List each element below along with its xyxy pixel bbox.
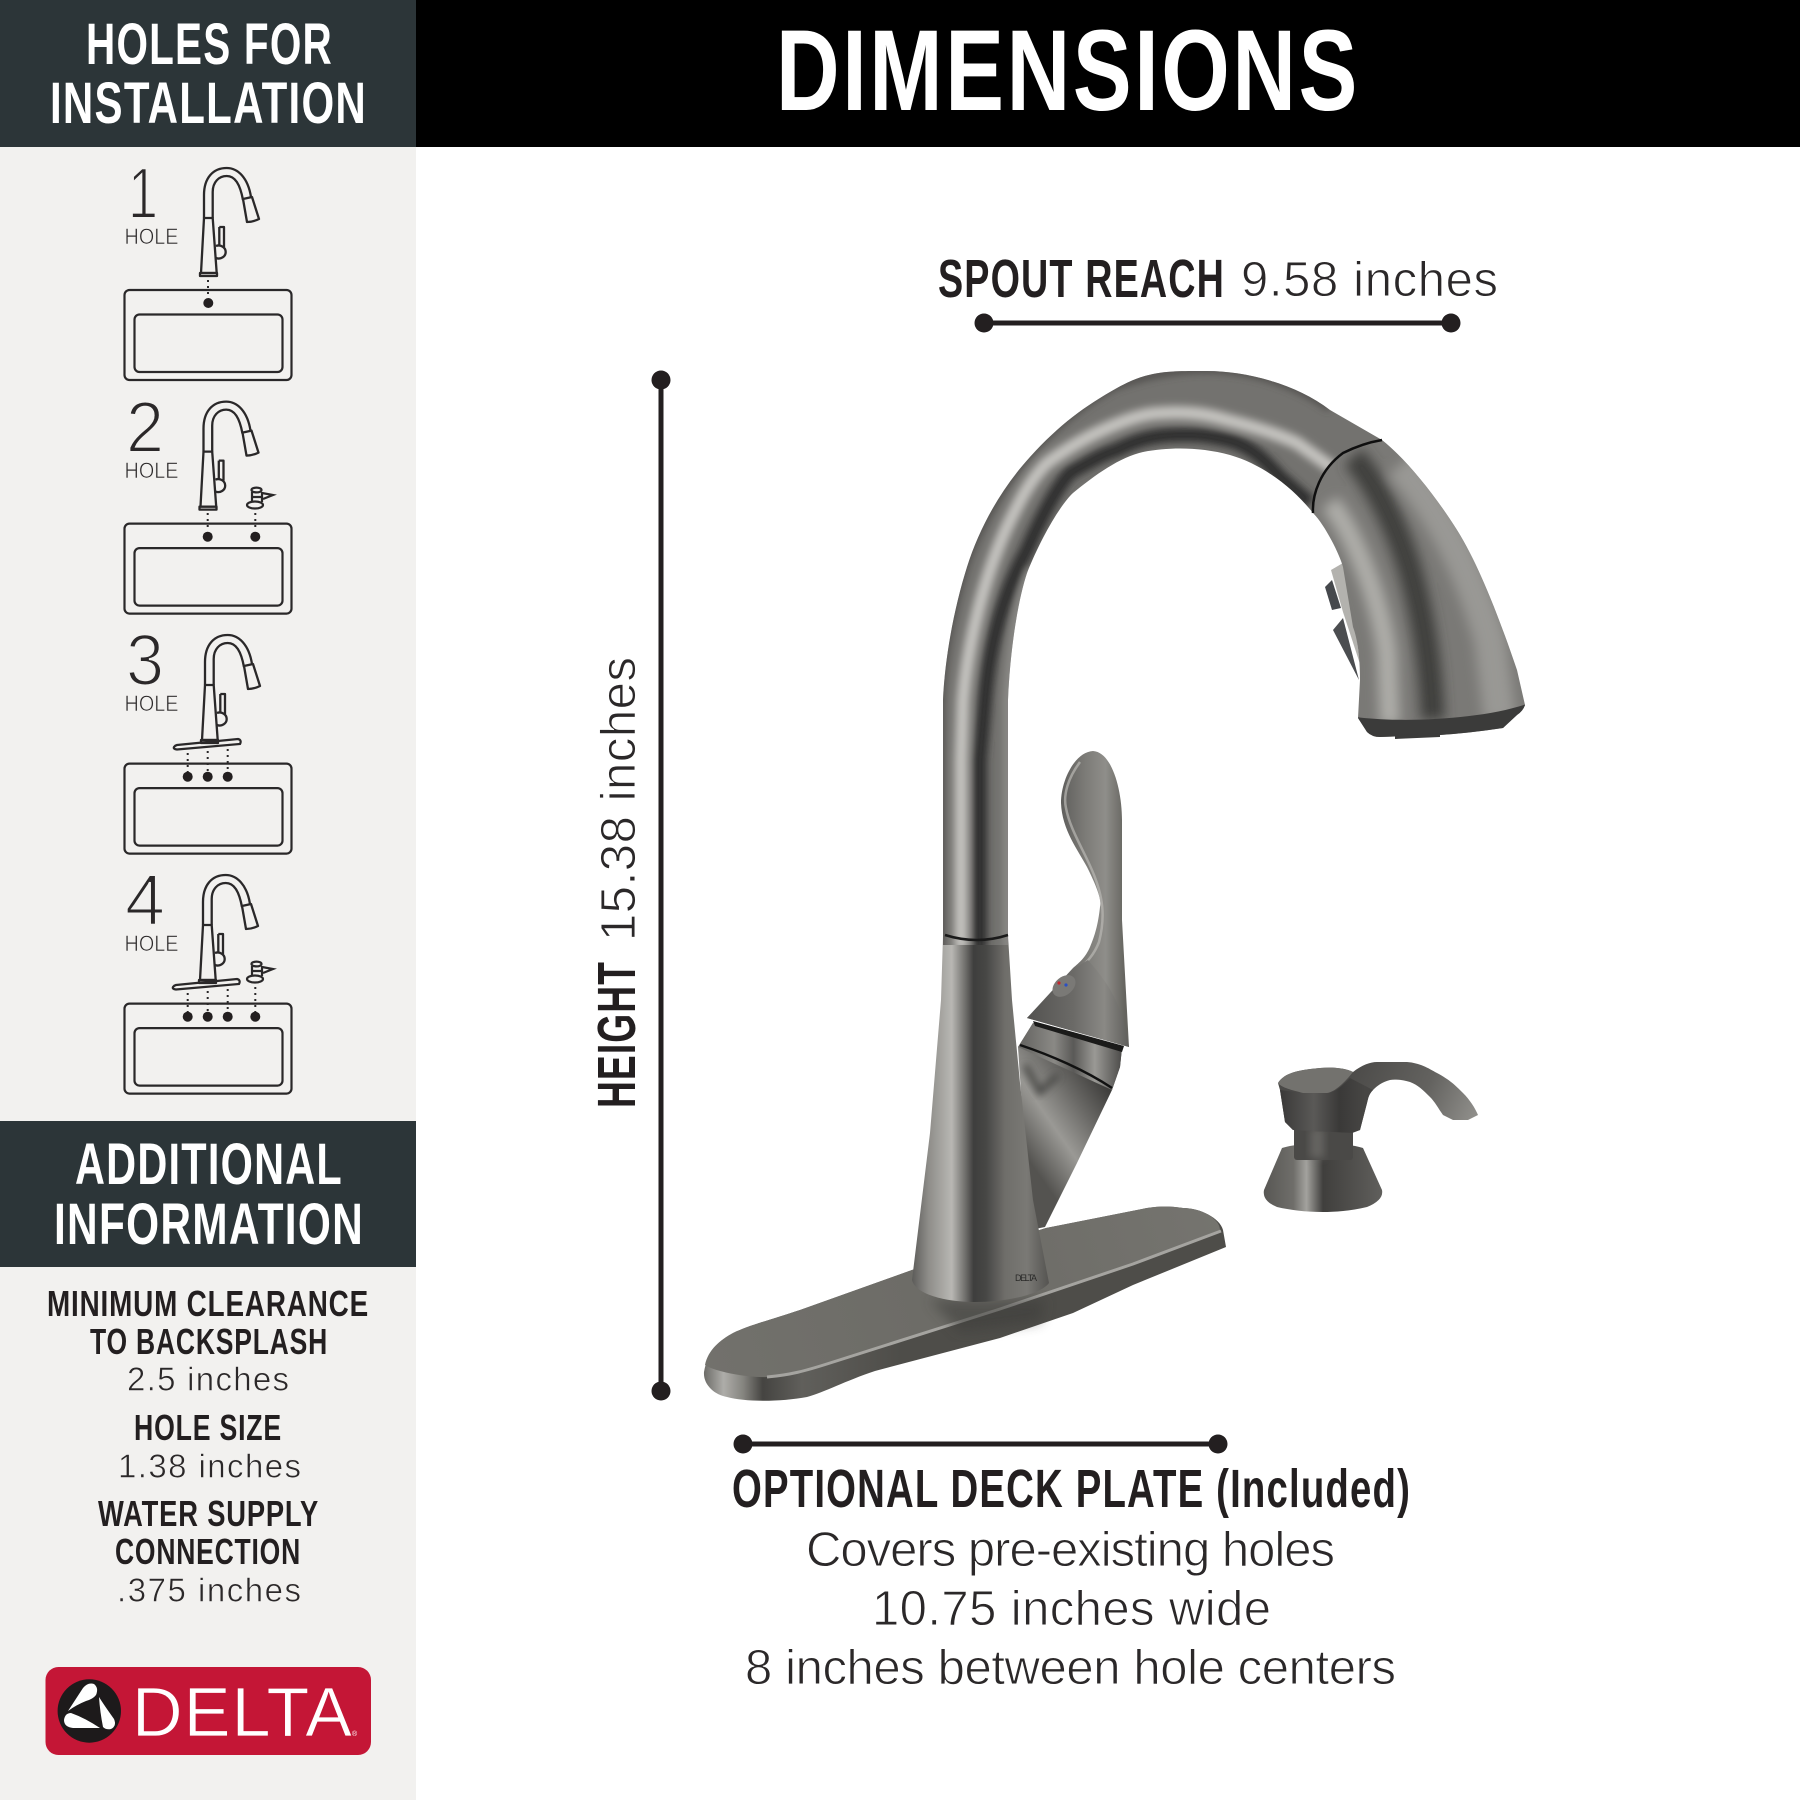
text block: water supply connection: WATER SUPPLY bbox=[98, 1493, 319, 1534]
text block: minimum clearance: 2.5 inches bbox=[127, 1360, 289, 1398]
dimension: spout reach: SPOUT REACH bbox=[938, 249, 1225, 309]
heading: additional information: INFORMATION bbox=[54, 1192, 364, 1257]
soap dispenser bbox=[1264, 1062, 1478, 1212]
text block: minimum clearance: TO BACKSPLASH bbox=[90, 1321, 328, 1362]
icon: 1 hole sink: HOLE bbox=[124, 224, 178, 249]
text block: water supply connection: CONNECTION bbox=[115, 1531, 301, 1572]
dimension: optional deck plate: OPTIONAL DECK PLATE (Included) bbox=[732, 1459, 1411, 1519]
heading: holes for installation: HOLES FOR bbox=[86, 12, 333, 77]
faucet spout tube bbox=[930, 360, 1400, 950]
heading: holes for installation: INSTALLATION bbox=[50, 71, 367, 136]
faucet spray head bbox=[1312, 438, 1525, 739]
faucet body: DELTA bbox=[1015, 1273, 1037, 1283]
dimension: height: 15.38 inches bbox=[592, 657, 646, 941]
heading: additional information: ADDITIONAL bbox=[75, 1132, 343, 1197]
text block: hole size: 1.38 inches bbox=[118, 1448, 301, 1484]
icon: 3 hole sink: 3 bbox=[126, 621, 164, 701]
dimension: height: HEIGHT bbox=[587, 961, 647, 1108]
text block: water supply connection bbox=[98, 1493, 319, 1608]
logo: delta: ® bbox=[352, 1730, 358, 1738]
dimension: optional deck plate: 10.75 inches wide bbox=[872, 1582, 1271, 1636]
logo: delta: DELTA bbox=[132, 1673, 352, 1751]
text block: hole size bbox=[118, 1407, 301, 1484]
icon: 3 hole sink bbox=[124, 621, 292, 854]
icon: 2 hole sink: 2 bbox=[126, 388, 164, 468]
text block: minimum clearance: MINIMUM CLEARANCE bbox=[47, 1283, 369, 1324]
title banner: dimensions: DIMENSIONS bbox=[776, 7, 1360, 135]
panel: left sidebar bbox=[0, 0, 416, 1800]
icon: 4 hole sink: HOLE bbox=[124, 931, 178, 956]
heading: holes for installation bbox=[0, 0, 416, 147]
faucet deck plate bbox=[704, 1206, 1226, 1401]
dimension: optional deck plate: Covers pre-existing holes bbox=[806, 1523, 1335, 1577]
heading: additional information bbox=[0, 1121, 416, 1267]
dimension: spout reach: 9.58 inches bbox=[1241, 253, 1498, 307]
text block: hole size: HOLE SIZE bbox=[134, 1407, 282, 1448]
dimension: spout reach bbox=[938, 249, 1498, 332]
illustration: faucet bbox=[704, 360, 1540, 1401]
text block: minimum clearance bbox=[47, 1283, 369, 1398]
faucet spray buttons bbox=[1325, 563, 1360, 680]
icon: 1 hole sink bbox=[124, 154, 292, 380]
icon: 4 hole sink bbox=[124, 861, 292, 1094]
text block: water supply connection: .375 inches bbox=[117, 1572, 301, 1608]
faucet body bbox=[912, 936, 1049, 1302]
dimension: optional deck plate: 8 inches between hole centers bbox=[745, 1641, 1396, 1695]
icon: 2 hole sink bbox=[124, 388, 292, 614]
icon: 2 hole sink: HOLE bbox=[124, 458, 178, 483]
icon: 3 hole sink: HOLE bbox=[124, 691, 178, 716]
icon: 4 hole sink: 4 bbox=[125, 861, 165, 941]
dimension: height bbox=[587, 370, 670, 1400]
faucet neck and mixer bbox=[1018, 1021, 1124, 1230]
logo: delta bbox=[46, 1667, 371, 1755]
faucet lever handle bbox=[1027, 751, 1129, 1047]
title banner: dimensions bbox=[416, 0, 1800, 147]
dimension: optional deck plate bbox=[732, 1434, 1411, 1695]
icon: 1 hole sink: 1 bbox=[128, 154, 158, 234]
